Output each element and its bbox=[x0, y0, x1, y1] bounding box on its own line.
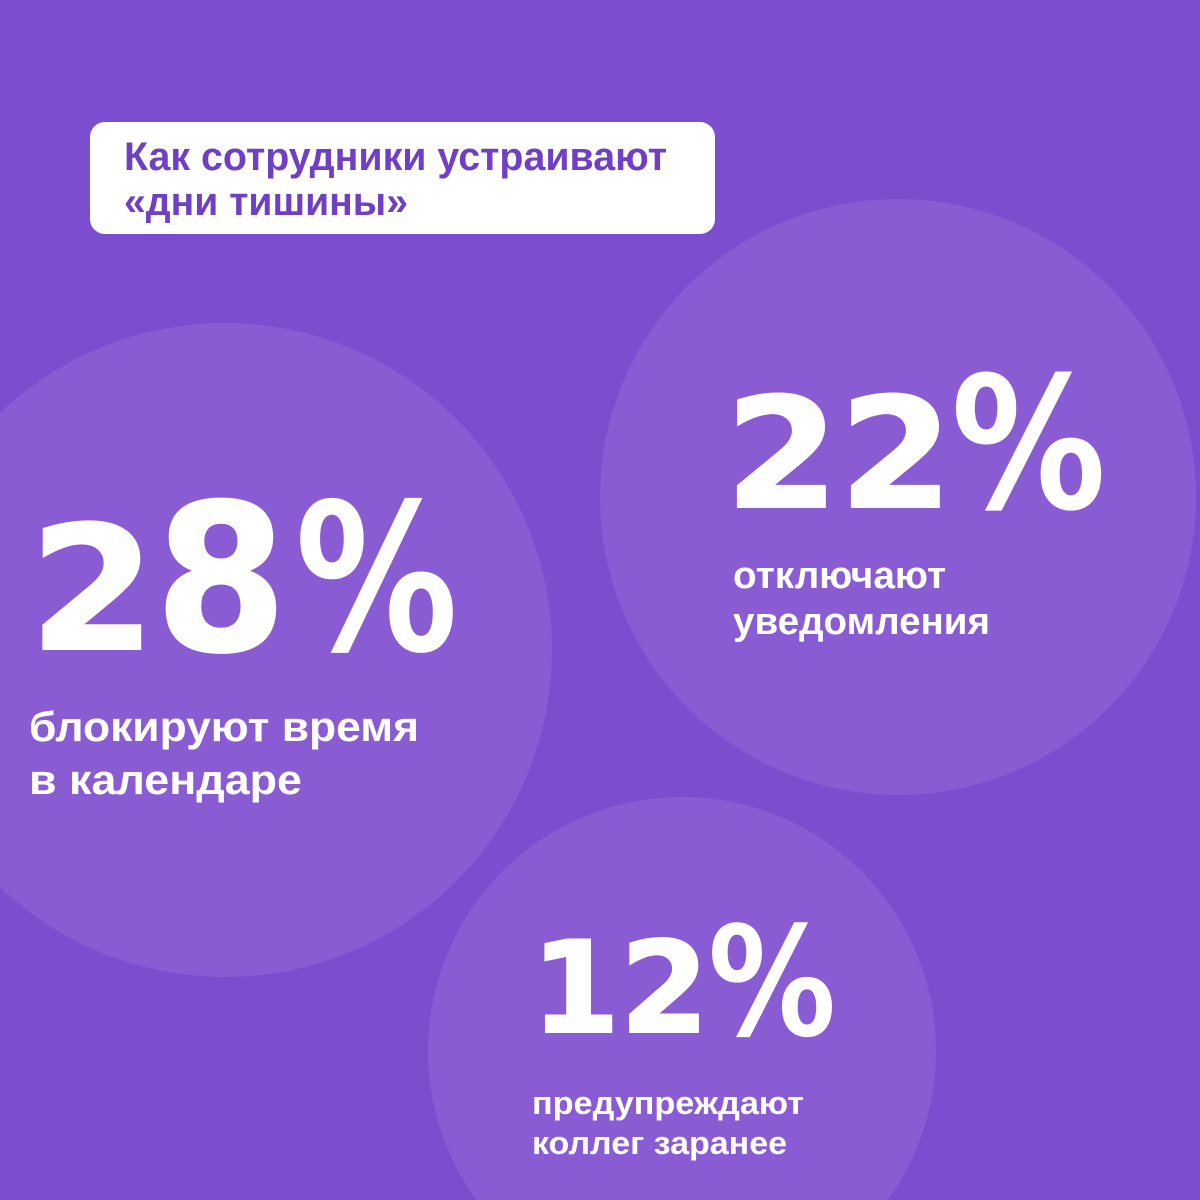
label: calendar blocking: блокируют время bbox=[29, 703, 419, 750]
number: 12%: % bbox=[708, 894, 836, 1071]
label: calendar blocking: в календаре bbox=[29, 756, 302, 803]
number: 28%: % bbox=[295, 461, 458, 699]
number: 28%: 2 bbox=[29, 489, 156, 690]
label: notifications off: уведомления bbox=[733, 601, 990, 643]
number: 28% bbox=[29, 461, 458, 699]
panel: 28% calendar blocking bbox=[0, 323, 552, 977]
title text: «дни тишины» bbox=[124, 180, 408, 224]
panel: 22% notifications off bbox=[600, 199, 1196, 795]
number: 28%: 8 bbox=[155, 462, 287, 699]
label: warn colleagues: предупреждают bbox=[532, 1085, 804, 1121]
number: 12%: 12 bbox=[531, 914, 709, 1062]
label: notifications off: отключают bbox=[733, 555, 946, 597]
panel: 12% warn colleagues bbox=[428, 797, 936, 1200]
label: warn colleagues: коллег заранее bbox=[532, 1125, 787, 1161]
title card bbox=[90, 122, 715, 234]
number: 22% bbox=[725, 338, 1106, 552]
number: 22%: % bbox=[951, 338, 1106, 552]
number: 22%: 22 bbox=[725, 366, 953, 544]
title text: Как сотрудники устраивают bbox=[124, 135, 667, 179]
number: 12% bbox=[531, 894, 836, 1071]
